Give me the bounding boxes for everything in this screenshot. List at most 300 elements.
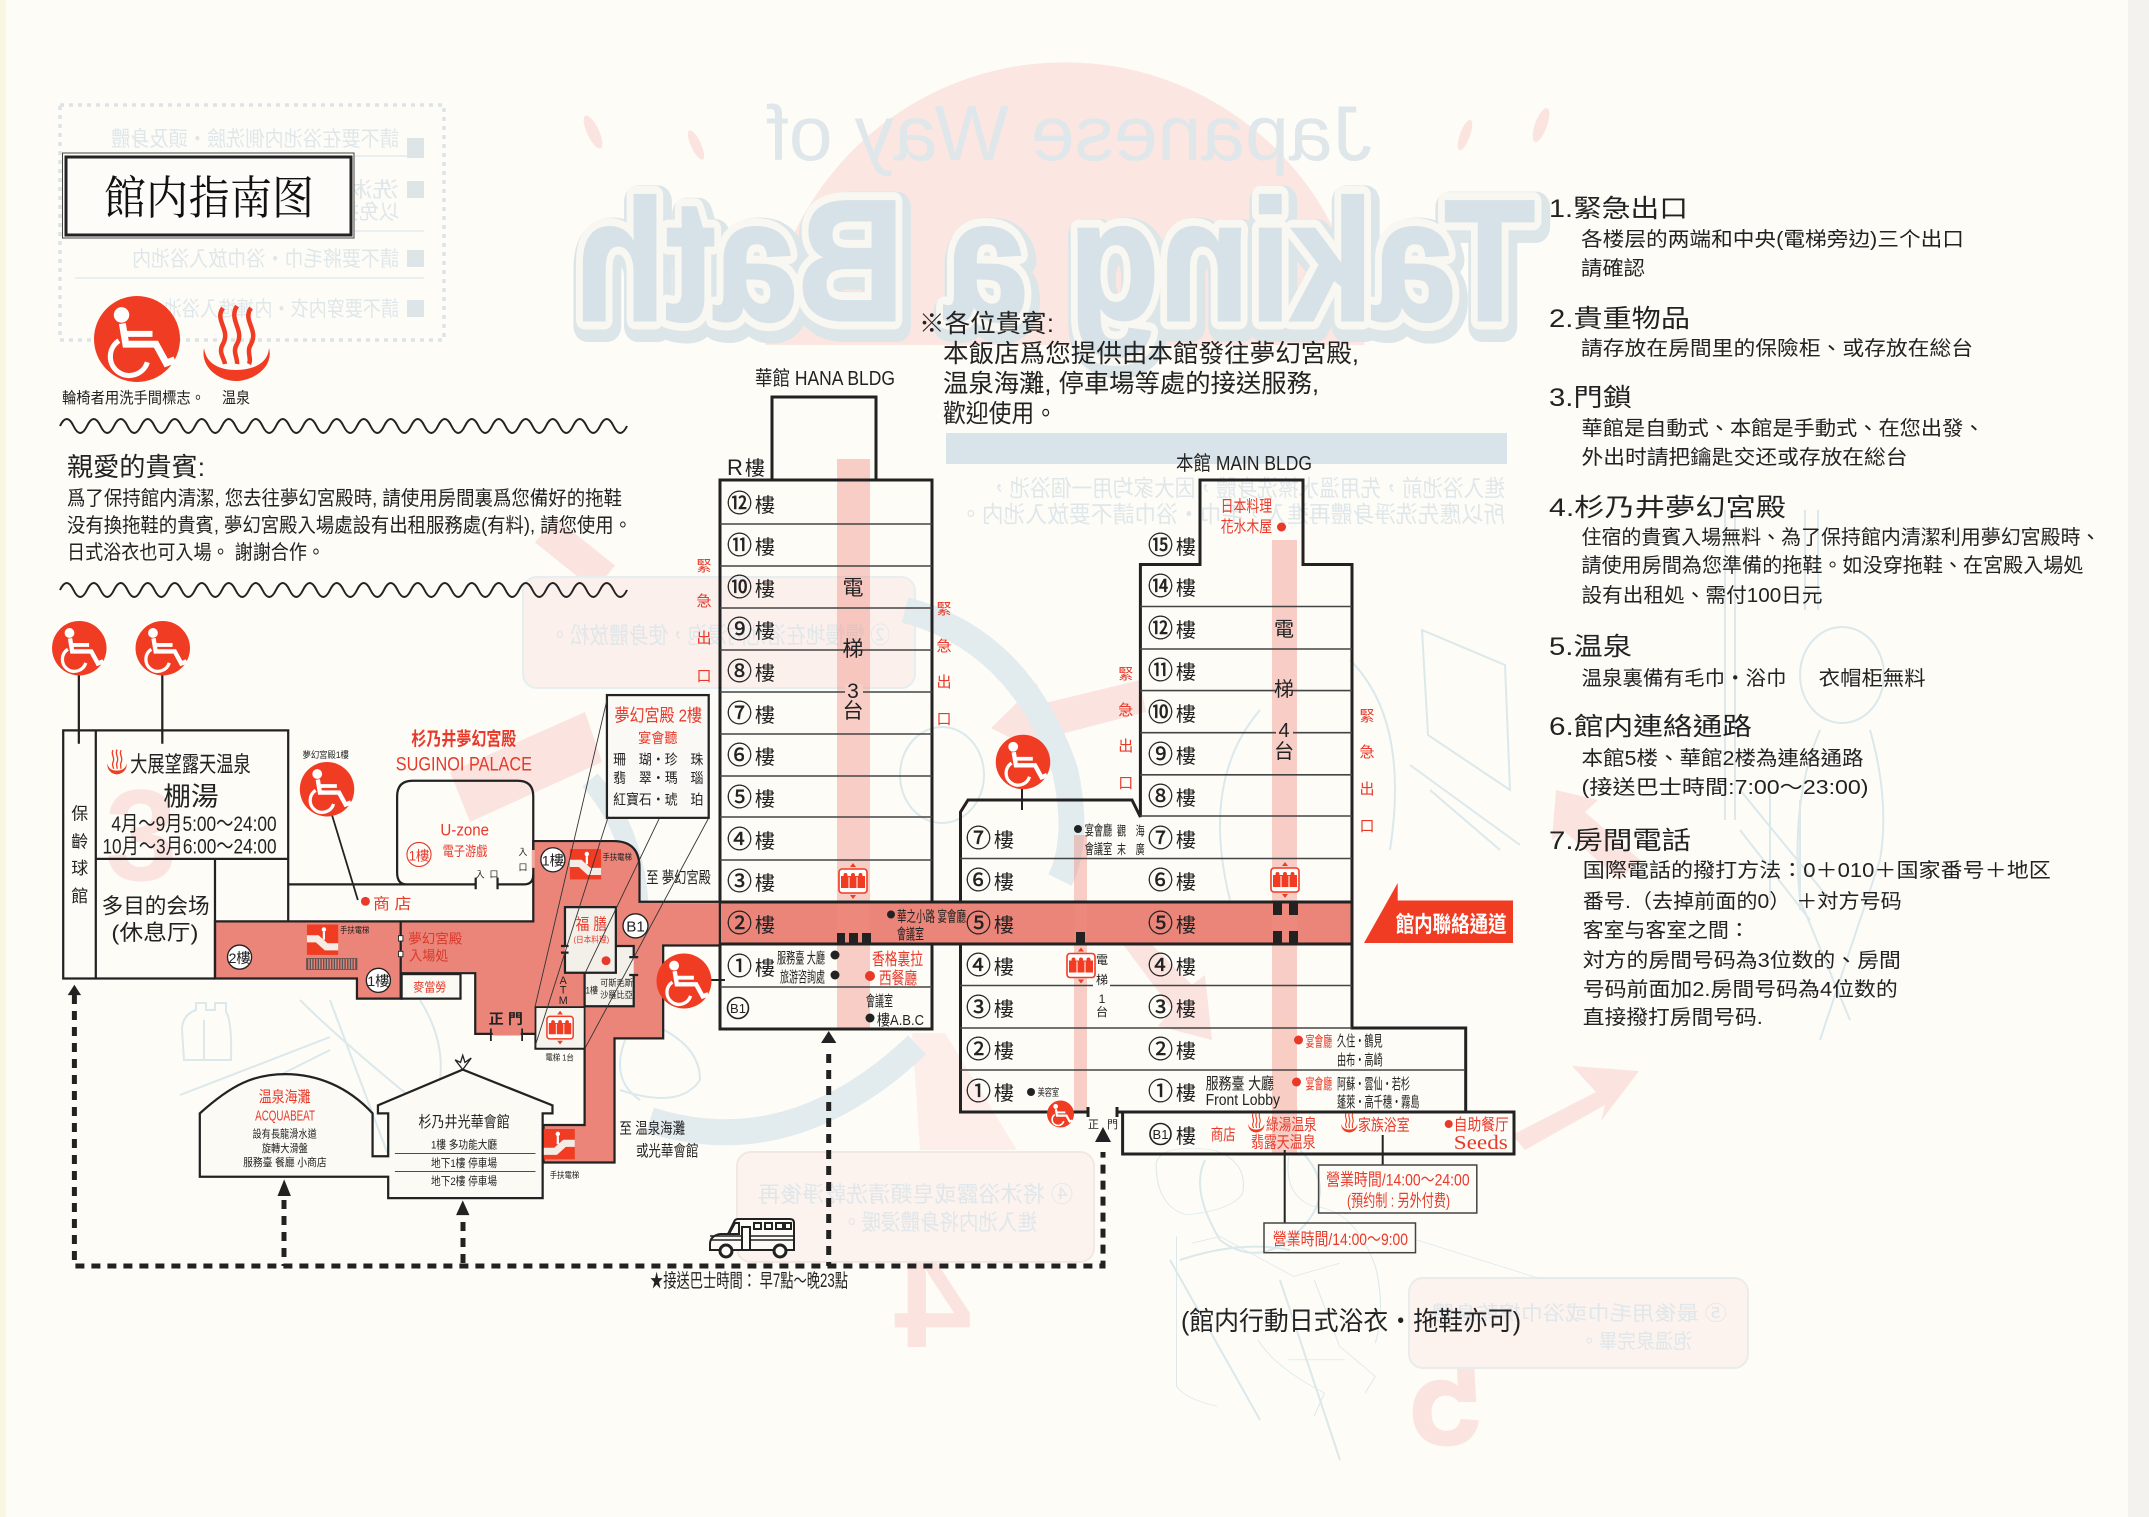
Main floor labels: ⑦樓 — [1148, 825, 1196, 853]
lower-floor escalator — [307, 925, 370, 970]
Hana floor labels: ⑩樓 — [727, 574, 775, 602]
ghost: pink droplets — [580, 106, 1553, 162]
Hana outline — [720, 397, 932, 1029]
upper escalator — [570, 849, 632, 879]
palace elevator — [536, 1007, 585, 1063]
panel: palace 2F banquet rooms: 珊 瑚・珍 珠 — [613, 751, 703, 768]
shuttle bus hours: ★接送巴士時間： 早7點～晚23點 — [650, 1270, 848, 1292]
yukata note: (館内行動日式浴衣・拖鞋亦可) — [1181, 1306, 1521, 1336]
Main floor labels: ⑭樓 — [1148, 573, 1196, 601]
item 3 door lock — [1549, 384, 1984, 469]
direction labels: 至 温泉海灘 — [619, 1120, 685, 1137]
Hana emergency exit labels: 出 — [696, 630, 712, 647]
ghost: pink step panels — [523, 577, 1748, 1368]
notice to guests: ※各位貴賓: — [919, 310, 1054, 338]
annex floor labels: ②樓 — [966, 1036, 1014, 1064]
Main emergency exit labels: 口 — [1359, 818, 1375, 835]
ghost: blue band and mirrored text: 進入浴池前，先用溫水擦洗身體，因大家均用一個浴池， — [989, 475, 1505, 501]
Hana emergency exit labels: 口 — [936, 711, 952, 728]
Hana 2F rooms: 華之小路 宴會廳 — [897, 908, 966, 926]
palace entrance and McDonald's: 入場処 — [409, 949, 448, 964]
item 3 door lock: 外出时請把鑰匙交还或存放在総台 — [1582, 446, 1908, 469]
palace entrance and McDonald's: 夢幻宮殿 — [408, 932, 462, 947]
beauty salon: 美容室 — [1038, 1086, 1059, 1099]
Main floor labels: ⑩樓 — [1148, 699, 1196, 727]
bowling alley label — [71, 805, 88, 906]
ghost: pink step panels: 泡温泉完畢。 — [1580, 1330, 1692, 1353]
annex wheelchair toilet lower — [1047, 1100, 1074, 1128]
ghost: pink arrows and numerals: 4 — [894, 1220, 972, 1377]
icon: Main elevator — [1271, 862, 1299, 898]
ghost: pink arrows and numerals: 5 — [1409, 1317, 1483, 1476]
Main 2F banquet rooms: 宴會廳 — [1306, 1033, 1332, 1051]
annex floor labels: ⑦樓 — [966, 825, 1014, 853]
greeting paragraph — [67, 487, 632, 564]
multipurpose hall text — [102, 894, 210, 945]
bowling alley label: 館 — [71, 887, 88, 906]
Fukuzen restaurant: 福 膳 — [576, 915, 607, 933]
Main 2F banquet rooms: 久住・鶴見 — [1337, 1033, 1383, 1050]
ghost: mirrored subtitle: Japanese Way of — [767, 89, 1372, 177]
building: Hana — [656, 367, 966, 1029]
Main outline — [720, 480, 1514, 1154]
item 7 room telephone: 7.房間電話 — [1549, 827, 1691, 855]
Koka hall text — [419, 1114, 510, 1188]
item 2 valuables: 請存放在房間里的保險柜、或存放在総台 — [1581, 337, 1973, 360]
panel: palace 2F banquet rooms: 翡 翠・瑪 瑙 — [613, 770, 703, 787]
Main emergency exit labels: 急 — [1118, 702, 1133, 719]
Hana 1F rooms: 香格裏拉 — [872, 949, 923, 969]
direction labels: 至 夢幻宮殿 — [646, 869, 711, 887]
ghost: pink step panels: ④ 将沐浴露或皂類清洗乾淨後再 — [758, 1182, 1073, 1207]
U-zone room: 1樓 — [409, 848, 429, 863]
Hana floor labels — [727, 455, 775, 1018]
annex wheelchair toilet upper — [996, 735, 1050, 810]
item 5 hot spring: 5.温泉 — [1549, 633, 1632, 661]
Hana floor labels: ⑧樓 — [727, 658, 775, 686]
Main emergency exit labels: 緊 — [1118, 666, 1133, 683]
notice to guests: 温泉海灘, 停車場等處的接送服務, — [943, 370, 1319, 398]
Main emergency exit labels: 出 — [1118, 738, 1133, 755]
Hana 1F rooms — [777, 949, 924, 1029]
callout arrow: connecting passage — [1364, 883, 1513, 943]
Koka hall text: 1樓 多功能大廳 — [431, 1138, 497, 1152]
item 2 valuables — [1549, 305, 1973, 360]
bowling alley label: 齡 — [71, 832, 88, 851]
Acquabeat text: 旋轉大滑盤 — [262, 1142, 308, 1155]
direction labels: 或光華會館 — [636, 1143, 698, 1160]
Main floor labels: ④樓 — [1148, 952, 1196, 980]
annex elevator: 台 — [1096, 1004, 1108, 1019]
item 4 suginoi palace: 4.杉乃井夢幻宮殿 — [1549, 494, 1786, 522]
Hana floor labels: ④樓 — [727, 826, 775, 854]
Hana floor labels: ⑪樓 — [727, 532, 775, 560]
icon: shuttle bus — [710, 1219, 794, 1257]
legend labels: 輪椅者用洗手間標志。 — [62, 389, 205, 407]
ghost: dotted rules box — [60, 105, 444, 340]
ghost: pink step panels: ⑤ 最後用毛巾或浴巾擦乾身體 — [1432, 1302, 1727, 1325]
Hana 1F rooms: 西餐廳 — [879, 969, 917, 988]
Acquabeat text: 温泉海灘 — [259, 1089, 311, 1106]
Acquabeat text: 服務臺 餐廳 小商店 — [243, 1156, 327, 1169]
Main 1F lobby and rooms: 宴會廳 — [1306, 1075, 1332, 1093]
direction labels — [619, 869, 711, 1160]
annex 7F rooms: 廣 — [1136, 842, 1145, 857]
ghost: pink sun — [766, 62, 1364, 345]
Main 2F banquet rooms: 由布・高崎 — [1337, 1052, 1383, 1069]
Main elevator label: 台 — [1274, 740, 1294, 763]
ATM label — [559, 975, 568, 1007]
main door label — [1088, 1118, 1118, 1131]
annex 7F rooms — [1074, 822, 1145, 857]
Main floor labels: ⑪樓 — [1148, 657, 1196, 685]
Main B1 facilities: 翡露天温泉 — [1251, 1134, 1316, 1152]
map: Suginoi Palace and annex wing — [52, 621, 720, 1215]
Hana floor labels: ②樓 — [727, 910, 775, 938]
Main floor labels: ⑮樓 — [1148, 532, 1196, 560]
ghost: mirrored title: Taking a Bath — [575, 165, 1535, 357]
outdoor bath text: 棚湯 — [163, 782, 219, 811]
U-zone room: 電子游戲 — [443, 844, 487, 859]
Hana elevator label: 電 — [842, 577, 864, 600]
ghost: pink arrows and numerals: 3 — [105, 762, 177, 908]
item 4 suginoi palace: 請使用房間為您準備的拖鞋。如没穿拖鞋、在宮殿入場処 — [1582, 554, 2084, 577]
Hana floor labels: ⑦樓 — [727, 700, 775, 728]
Hana floor labels: ⑤樓 — [727, 784, 775, 812]
annex elevator: 電 — [1096, 953, 1108, 967]
Main B1 facilities: 商店 — [1211, 1126, 1236, 1144]
palace entrance and McDonald's: 麥當勞 — [413, 979, 446, 994]
item 1 emergency exit — [1549, 195, 1964, 280]
multipurpose hall text: 多目的会场 — [102, 894, 210, 918]
Main B1 facilities: 家族浴室 — [1358, 1117, 1410, 1135]
item 7 room telephone: 対方的房間号码為3位数的、房間 — [1583, 949, 1901, 972]
annex 7F rooms: 海 — [1136, 824, 1145, 838]
callout: family bath hours: (預约制 : 另外付费) — [1347, 1192, 1450, 1211]
Main floor labels: ③樓 — [1148, 994, 1196, 1022]
Hana 1F rooms: 會議室 — [866, 992, 893, 1010]
main door: 正 門 — [489, 1011, 523, 1028]
Hana floor labels: ⑫樓 — [727, 490, 775, 518]
U-zone room: U-zone — [440, 821, 489, 840]
panel: right information list — [1549, 195, 2100, 1029]
Koka hall text: 地下2樓 停車場 — [431, 1174, 497, 1188]
Main elevator label — [1274, 619, 1294, 763]
upper escalator: 手扶電梯 — [602, 852, 632, 862]
panel: palace 2F banquet rooms — [535, 695, 709, 1048]
Main floor labels: ⑤樓 — [1148, 910, 1196, 938]
lower escalator: 手扶電梯 — [550, 1170, 580, 1180]
palace entrance and McDonald's — [398, 921, 462, 999]
callout: open-air bath hours — [1264, 1150, 1416, 1253]
arrows: hotel entrances — [821, 1031, 1111, 1142]
icon: Hana elevator — [839, 863, 867, 899]
Koka hall text: 地下1樓 停車場 — [431, 1156, 497, 1170]
bowling alley label: 保 — [71, 805, 88, 824]
lower-floor escalator: 手扶電梯 — [340, 925, 370, 935]
legend labels: 温泉 — [222, 389, 250, 407]
U-zone room: 入 — [476, 870, 485, 880]
Main 1F lobby and rooms — [1206, 1074, 1420, 1111]
Hana elevator label — [842, 577, 864, 723]
Main elevator label: 4 — [1278, 720, 1290, 742]
ghost: blue band and mirrored text: 所以應先洗淨身體再進入，毛巾・浴巾請不要放入池内。 — [960, 501, 1505, 527]
title text: 館内指南图 — [104, 173, 314, 224]
item 5 hot spring — [1549, 633, 1926, 690]
wheelchair toilets on bowling block — [52, 621, 190, 744]
ghost: blue curved bands — [590, 610, 1071, 1132]
greeting paragraph: 没有換拖鞋的貴賓, 夢幻宮殿入場處設有出租服務處(有料), 請您使用。 — [67, 514, 632, 537]
panel: palace 2F banquet rooms: 紅寶石・琥 珀 — [613, 790, 703, 808]
building: Acquabeat and Koka hall — [200, 1055, 552, 1198]
Fukuzen restaurant: 1樓 — [586, 985, 598, 996]
annex floor labels: ⑤樓 — [966, 910, 1014, 938]
Acquabeat text: 設有長龍滑水道 — [252, 1127, 317, 1140]
Acquabeat text: ACQUABEAT — [255, 1108, 315, 1125]
item 6 connecting passage: 本館5楼、華館2楼為連絡通路 — [1582, 747, 1864, 770]
Fukuzen restaurant: 沙羅比亞 — [600, 989, 633, 1000]
Koka hall text: 杉乃井光華會館 — [419, 1114, 510, 1131]
Hana emergency exit labels — [696, 558, 952, 728]
annex 7F rooms: 觀 — [1117, 824, 1126, 838]
icon: bath — [107, 750, 127, 774]
ghost: mirrored title: Taking a Bath — [578, 171, 1538, 363]
Japanese restaurant — [1221, 498, 1286, 536]
ghost: pink arrows and numerals — [105, 530, 1640, 1476]
main door — [489, 1011, 523, 1041]
Main floor labels: B1 — [1153, 1127, 1168, 1142]
Main 1F lobby and rooms: 阿蘇・雲仙・若杉 — [1337, 1076, 1410, 1093]
Main elevator label: 梯 — [1274, 678, 1294, 701]
greeting paragraph: 爲了保持館内清潔, 您去往夢幻宮殿時, 請使用房間裏爲您備好的拖鞋 — [67, 487, 622, 510]
Hana floor labels: ⑨樓 — [727, 616, 775, 644]
palace wheelchair toilet and shop: 商 店 — [373, 896, 411, 913]
Main floor labels: ⑫樓 — [1148, 615, 1196, 643]
Main emergency exit labels: 出 — [1359, 781, 1375, 798]
ghost: dotted rules box: 請不要在浴池内側洗臉・頭及身體 — [111, 128, 399, 151]
annex 7F rooms: 末 — [1117, 842, 1126, 857]
Main floor labels: ⑥樓 — [1148, 867, 1196, 895]
Hana floor labels: ①樓 — [727, 953, 775, 981]
item 6 connecting passage — [1549, 713, 1868, 799]
item 7 room telephone — [1549, 827, 2051, 1029]
item 1 emergency exit: 各楼层的两端和中央(電梯旁边)三个出口 — [1581, 228, 1964, 251]
greeting paragraph: 日式浴衣也可入場。 謝謝合作。 — [67, 541, 325, 564]
Main B1 facilities: 自助餐厅 — [1454, 1116, 1509, 1134]
ATM label: T — [560, 985, 567, 997]
floor badges: B1 — [626, 919, 645, 936]
Fukuzen restaurant — [561, 907, 638, 1006]
outdoor bath text: 10月～3月6:00～24:00 — [102, 835, 277, 859]
annex floor labels: ④樓 — [966, 952, 1014, 980]
Hana floor labels: B1 — [730, 1001, 746, 1016]
bowling and outdoor bath block — [63, 730, 288, 979]
item 7 room telephone: 直接撥打房間号码. — [1583, 1006, 1763, 1029]
Main B1 facilities: Seeds — [1454, 1132, 1508, 1154]
Hana heading: 華館 HANA BLDG — [755, 367, 895, 390]
panel: palace 2F banquet rooms: 夢幻宮殿 2樓 — [615, 705, 702, 725]
ghost: pink step panels: 進入池内将身體浸暖。 — [842, 1210, 1037, 1235]
ghost: dotted rules box: 請不要將毛巾・浴巾放入浴池内 — [132, 248, 399, 271]
Fukuzen restaurant: (日本料理) — [573, 934, 609, 944]
greeting heading: 親愛的貴賓: — [67, 452, 205, 482]
outdoor bath text: 4月～9月5:00～24:00 — [111, 812, 277, 836]
red floor area — [215, 841, 720, 1162]
Hana wheelchair toilet — [656, 954, 725, 1008]
Main emergency exit labels — [1118, 666, 1375, 835]
annex floor labels: ③樓 — [966, 994, 1014, 1022]
floor badges: 1樓 — [542, 853, 564, 870]
annex 7F rooms: 會議室 — [1085, 841, 1112, 857]
building: Main — [720, 452, 1514, 1253]
icon: wheelchair legend — [94, 296, 180, 382]
Main floor labels: ⑨樓 — [1148, 741, 1196, 769]
Main 2F banquet rooms — [1294, 1033, 1383, 1069]
item 6 connecting passage: (接送巴士時間:7:00～23:00) — [1582, 776, 1868, 799]
Japanese restaurant: 花水木屋 — [1221, 518, 1272, 536]
beauty salon — [1027, 1086, 1059, 1099]
item 3 door lock: 3.門鎖 — [1549, 384, 1632, 412]
Main B1 facilities — [1211, 1113, 1509, 1154]
Fukuzen restaurant: 可斯毛斯 — [600, 977, 633, 988]
elevator shaft strips — [837, 459, 1297, 1154]
item 7 room telephone: 番号.（去掉前面的0） ＋対方号码 — [1583, 890, 1902, 913]
icon: hot spring legend — [203, 306, 270, 381]
outdoor bath text — [102, 752, 277, 859]
Main 1F lobby and rooms: 服務臺 大廳 — [1206, 1074, 1274, 1093]
item 2 valuables: 2.貴重物品 — [1549, 305, 1690, 333]
Main floor labels: ⑧樓 — [1148, 783, 1196, 811]
floor badges: 2樓 — [228, 950, 251, 967]
palace heading: SUGINOI PALACE — [396, 754, 532, 776]
Hana emergency exit labels: 急 — [696, 593, 712, 610]
Hana elevator label: 3 — [847, 680, 859, 703]
annex floor labels: ①樓 — [966, 1078, 1014, 1106]
Main stair blocks — [1076, 902, 1298, 943]
floor badges: 1樓 — [367, 973, 389, 990]
Hana 1F rooms: 樓A.B.C — [877, 1012, 924, 1029]
Main elevator label: 電 — [1274, 619, 1294, 641]
annex floor labels — [966, 825, 1014, 1106]
Hana 2F rooms — [887, 908, 966, 943]
Japanese restaurant: 日本料理 — [1221, 498, 1272, 516]
callout arrow: connecting passage: 館内聯絡通道 — [1396, 912, 1507, 937]
notice to guests: 本飯店爲您提供由本館發往夢幻宮殿, — [943, 340, 1359, 368]
item 1 emergency exit: 1.緊急出口 — [1549, 195, 1688, 223]
U-zone room — [288, 781, 533, 889]
item 4 suginoi palace: 設有出租処、需付100日元 — [1582, 584, 1822, 607]
Hana 2F rooms: 會議室 — [897, 925, 924, 943]
item 5 hot spring: 温泉裏備有毛巾・浴巾 — [1582, 667, 1786, 690]
Hana emergency exit labels: 急 — [936, 638, 952, 655]
item 3 door lock: 華館是自動式、本館是手動式、在您出發、 — [1582, 417, 1984, 440]
Main heading: 本館 MAIN BLDG — [1176, 452, 1312, 475]
callout: family bath hours: 營業時間/14:00～24:00 — [1326, 1171, 1470, 1190]
item 6 connecting passage: 6.館内連絡通路 — [1549, 713, 1752, 741]
Main B1 facilities: 綠湯温泉 — [1266, 1116, 1317, 1134]
ghost: mirrored title: Taking a Bath — [575, 165, 1535, 357]
Hana emergency exit labels: 口 — [696, 668, 712, 685]
arrows: shuttle drop-offs — [68, 985, 469, 1215]
Hana floor labels: ⑥樓 — [727, 742, 775, 770]
ATM label: M — [559, 995, 568, 1007]
Acquabeat text — [243, 1089, 327, 1169]
Main floor labels: ②樓 — [1148, 1036, 1196, 1064]
Main emergency exit labels: 口 — [1118, 775, 1133, 792]
Main floor labels: ①樓 — [1148, 1078, 1196, 1106]
Hana elevator label: 梯 — [842, 638, 864, 661]
connecting corridor band — [720, 902, 1352, 944]
ghost: dotted rules box: 以免打擾別人 — [279, 201, 399, 224]
ghost: blue band and mirrored text — [946, 433, 1507, 527]
ATM label: A — [560, 975, 568, 987]
ghost: pink step panels: ② 慢慢地在浴池内浸泡，使身體放松。 — [550, 622, 890, 648]
Hana emergency exit labels: 緊 — [696, 558, 712, 575]
lower escalator — [544, 1129, 580, 1180]
Hana 1F rooms: 旅游咨詢處 — [780, 969, 825, 986]
notice to guests: 歡迎使用。 — [943, 400, 1057, 428]
annex 7F rooms: 宴會廳 — [1085, 822, 1112, 838]
Hana stair blocks — [837, 933, 871, 944]
palace heading: 杉乃井夢幻宮殿 — [411, 729, 517, 750]
annex floor labels: ⑥樓 — [966, 867, 1014, 895]
palace wheelchair toilet and shop — [300, 749, 411, 913]
palace heading — [396, 729, 532, 776]
main door label: 正 — [1088, 1119, 1099, 1131]
Hana floor labels: 樓 — [745, 457, 765, 480]
floor badges — [227, 848, 648, 992]
item 7 room telephone: 客室与客室之間： — [1583, 919, 1750, 942]
title box — [62, 153, 354, 238]
U-zone room: 入 — [519, 847, 528, 857]
item 4 suginoi palace: 住宿的貴賓入場無料、為了保持館内清潔利用夢幻宮殿時、 — [1582, 526, 2100, 549]
ghost: dotted rules box: 請不要穿内衣・内褲進入浴池 — [164, 298, 399, 321]
Main 1F lobby and rooms: Front Lobby — [1206, 1092, 1280, 1109]
item 4 suginoi palace — [1549, 494, 2100, 607]
Hana floor labels: R — [727, 455, 743, 480]
print-through background artwork — [60, 62, 1884, 1476]
Main floor labels — [1148, 532, 1196, 1148]
Main emergency exit labels: 緊 — [1359, 708, 1375, 725]
Hana emergency exit labels: 出 — [936, 674, 952, 691]
Hana 1F rooms: 服務臺 大廳 — [777, 949, 825, 967]
outdoor bath text: 大展望露天温泉 — [130, 752, 251, 777]
main door label: 門 — [1107, 1118, 1118, 1131]
Hana emergency exit labels: 緊 — [936, 601, 952, 618]
Main floor labels: 樓 — [1176, 1125, 1196, 1148]
palace wheelchair toilet and shop: 夢幻宮殿1樓 — [302, 749, 349, 760]
multipurpose hall text: (休息厅) — [111, 921, 198, 945]
item 7 room telephone: 国際電話的撥打方法：0＋010＋国家番号＋地区 — [1583, 859, 2051, 882]
shuttle bus dashed route — [74, 995, 1111, 1266]
notice to guests — [919, 310, 1359, 428]
callout: family bath hours — [1319, 1135, 1477, 1213]
item 1 emergency exit: 請確認 — [1581, 257, 1645, 280]
item 5 hot spring: 衣帽柜無料 — [1819, 667, 1926, 690]
Hana elevator label: 台 — [842, 700, 864, 723]
annex elevator: 梯 — [1096, 973, 1108, 987]
callout: open-air bath hours: 營業時間/14:00～9:00 — [1273, 1230, 1408, 1249]
Main emergency exit labels: 急 — [1359, 744, 1375, 761]
palace elevator: 電梯 1台 — [545, 1053, 574, 1063]
U-zone room: 口 — [490, 870, 498, 880]
ghost: dotted rules box: 洗淋浴時請注意身旁的人, — [100, 179, 399, 202]
ghost: line-drawn bathers — [180, 510, 1884, 1460]
U-zone room: 口 — [519, 863, 527, 873]
annex elevator: 1 — [1099, 992, 1106, 1006]
Main 1F lobby and rooms: 蓬萊・高千穗・霧島 — [1337, 1094, 1420, 1111]
item 7 room telephone: 号码前面加2.房間号码為4位数的 — [1583, 978, 1898, 1001]
